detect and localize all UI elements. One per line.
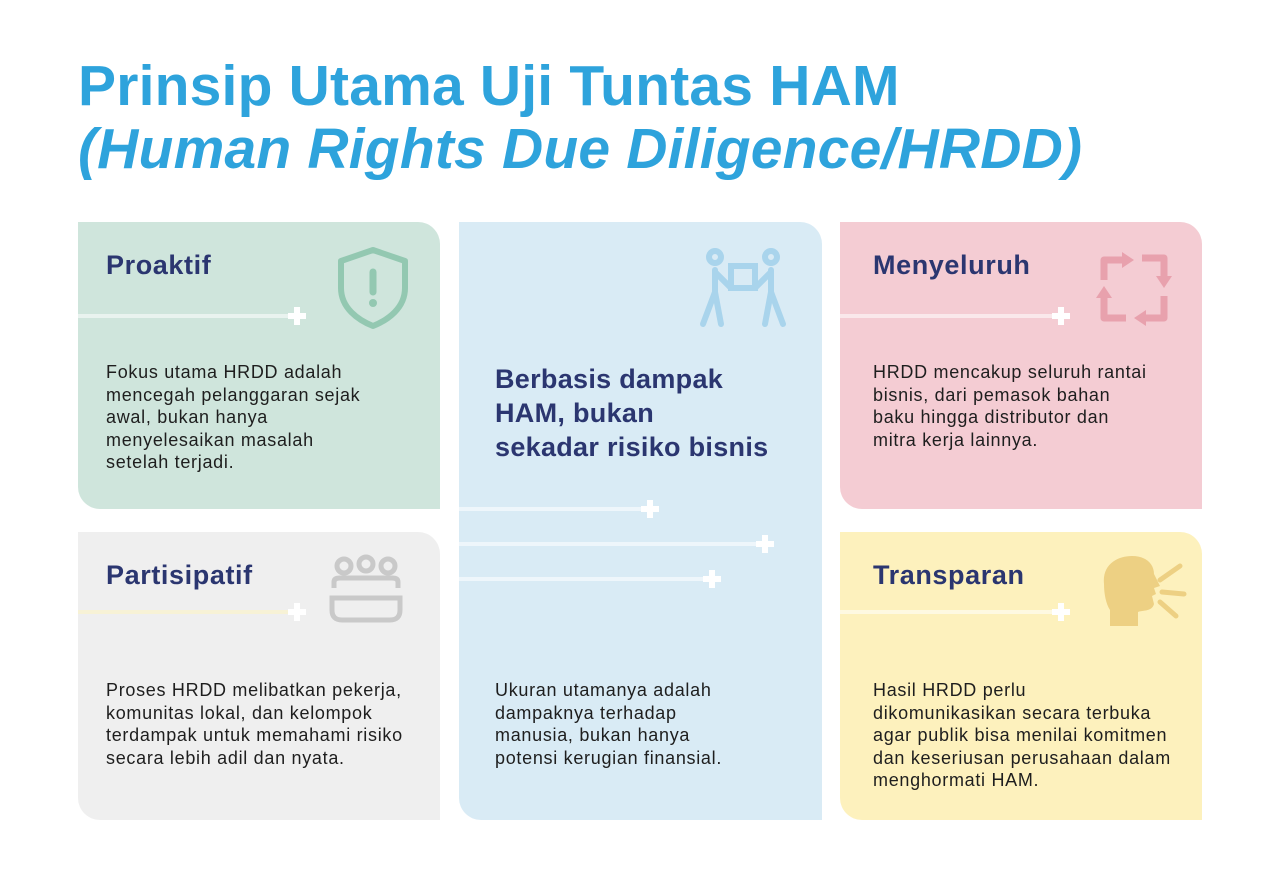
text: proaktif: Fokus utama HRDD adalah — [106, 362, 342, 382]
panel: transparan — [840, 532, 1202, 820]
text: partisipatif — [106, 680, 403, 768]
text: menyeluruh: bisnis, dari pemasok bahan — [873, 384, 1110, 404]
text: berbasis dampak: Ukuran utamanya adalah — [495, 680, 712, 700]
text: transparan: dan keseriusan perusahaan dalam — [873, 748, 1171, 768]
heading: partisipatif: Partisipatif — [106, 560, 253, 590]
text: partisipatif: secara lebih adil dan nyata. — [106, 748, 345, 768]
text: transparan: agar publik bisa menilai komitmen — [873, 725, 1167, 745]
text: menyeluruh — [873, 362, 1147, 450]
title: Prinsip Utama Uji Tuntas HAM — [78, 54, 900, 118]
text: proaktif: menyelesaikan masalah — [106, 430, 314, 450]
icon: group — [330, 554, 402, 622]
icon: cycle arrows — [1096, 252, 1172, 326]
text: berbasis dampak: manusia, bukan hanya — [495, 725, 690, 745]
heading: proaktif: Proaktif — [106, 250, 211, 280]
text: proaktif: setelah terjadi. — [106, 452, 234, 472]
text: menyeluruh: mitra kerja lainnya. — [873, 430, 1038, 450]
text: partisipatif: terdampak untuk memahami risiko — [106, 725, 403, 745]
heading: transparan: Transparan — [873, 560, 1025, 590]
icon: two people carrying box — [700, 248, 786, 327]
text: berbasis dampak: potensi kerugian finansial. — [495, 748, 722, 768]
text: proaktif — [106, 362, 360, 472]
text: menyeluruh: HRDD mencakup seluruh rantai — [873, 362, 1147, 382]
text: berbasis dampak — [495, 680, 722, 768]
text: berbasis dampak: dampaknya terhadap — [495, 702, 677, 722]
heading: berbasis dampak: sekadar risiko bisnis — [495, 432, 768, 462]
panel: partisipatif — [78, 532, 440, 820]
text: proaktif: awal, bukan hanya — [106, 407, 268, 427]
text: transparan — [873, 680, 1171, 790]
title: (Human Rights Due Diligence/HRDD) — [78, 117, 1082, 181]
text: transparan: menghormati HAM. — [873, 770, 1039, 790]
heading: berbasis dampak: Berbasis dampak — [495, 364, 723, 394]
title — [78, 54, 1082, 181]
text: partisipatif: komunitas lokal, dan kelompok — [106, 702, 372, 722]
text: transparan: dikomunikasikan secara terbuka — [873, 702, 1151, 722]
heading: berbasis dampak: HAM, bukan — [495, 398, 654, 428]
panel: menyeluruh — [840, 222, 1202, 509]
icon: shield — [338, 247, 408, 329]
icon: speaking head — [1104, 556, 1186, 626]
heading: berbasis dampak — [495, 364, 768, 462]
text: partisipatif: Proses HRDD melibatkan pekerja, — [106, 680, 402, 700]
panel: berbasis dampak — [459, 222, 822, 820]
text: proaktif: mencegah pelanggaran sejak — [106, 384, 360, 404]
heading: menyeluruh: Menyeluruh — [873, 250, 1031, 280]
text: menyeluruh: baku hingga distributor dan — [873, 407, 1109, 427]
panel: proaktif — [78, 222, 440, 509]
text: transparan: Hasil HRDD perlu — [873, 680, 1026, 700]
